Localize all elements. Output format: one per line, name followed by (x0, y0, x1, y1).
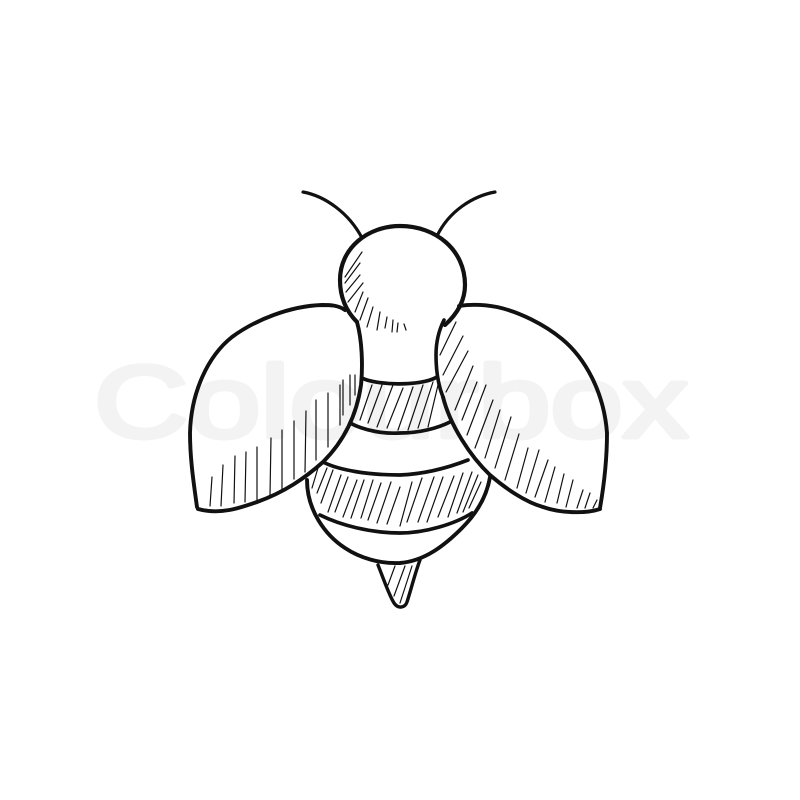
body stripe 4 (320, 513, 472, 533)
body stripe 2 (350, 422, 450, 433)
right wing hatching (440, 322, 597, 508)
head outline (340, 226, 465, 325)
neck right edge (436, 320, 444, 397)
right antenna (437, 192, 495, 236)
stinger (378, 560, 420, 607)
bee (190, 192, 607, 607)
body stripe 1 (362, 377, 437, 384)
watermark: Colourbox: Colourbox (94, 345, 688, 459)
upper band hatching (360, 382, 438, 430)
lower band hatching (312, 468, 481, 526)
left wing hatching (210, 375, 355, 506)
stinger hatching (388, 566, 412, 603)
left wing (190, 305, 362, 511)
right wing (443, 305, 607, 512)
body lower outline (307, 477, 490, 563)
left antenna (303, 192, 362, 238)
body stripe 3 (325, 460, 468, 475)
head hatching (345, 252, 406, 332)
